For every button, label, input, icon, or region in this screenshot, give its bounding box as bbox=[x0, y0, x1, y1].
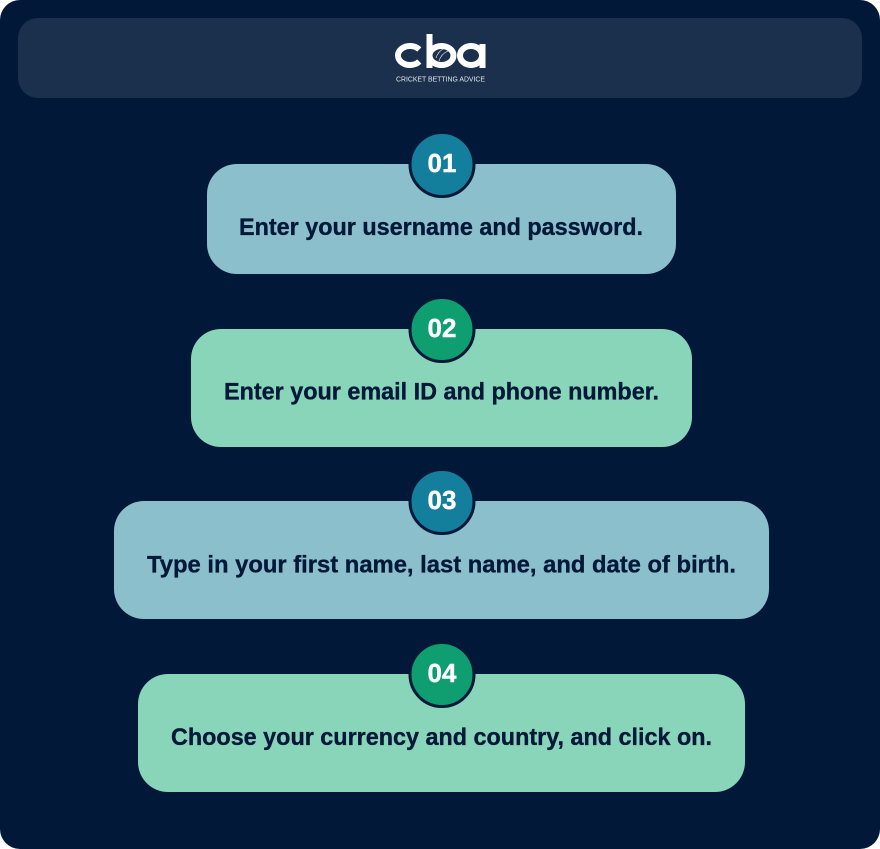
step 2 bbox=[191, 298, 692, 447]
step 3 bbox=[114, 470, 769, 619]
step 4 bbox=[138, 642, 745, 792]
step 3 card bbox=[114, 501, 769, 619]
step 3 badge bbox=[410, 470, 474, 534]
logo letter c bbox=[398, 46, 419, 65]
step 1 badge bbox=[410, 132, 474, 196]
step 2 badge: 02 bbox=[428, 313, 456, 343]
step 1 card bbox=[207, 164, 676, 274]
step 4 badge: 04 bbox=[428, 658, 457, 688]
step 1 text: Enter your username and password. bbox=[239, 214, 643, 241]
step 1 bbox=[207, 132, 676, 274]
step 3 text: Type in your first name, last name, and date of birth. bbox=[147, 552, 736, 578]
step 2 card bbox=[191, 329, 692, 447]
step 2 text: Enter your email ID and phone number. bbox=[224, 378, 659, 406]
logo letter b with cricket ball bbox=[426, 34, 454, 68]
step 4 card bbox=[138, 674, 745, 792]
step 4 text: Choose your currency and country, and click on. bbox=[171, 724, 712, 751]
logo bbox=[396, 34, 486, 84]
logo letter a bbox=[460, 44, 486, 68]
step 1 badge: 01 bbox=[428, 148, 456, 178]
step 3 badge: 03 bbox=[428, 485, 456, 515]
header bar bbox=[18, 18, 862, 98]
step 2 badge bbox=[410, 298, 474, 362]
step 4 badge bbox=[410, 642, 474, 706]
logo tagline: CRICKET BETTING ADVICE bbox=[396, 76, 485, 84]
